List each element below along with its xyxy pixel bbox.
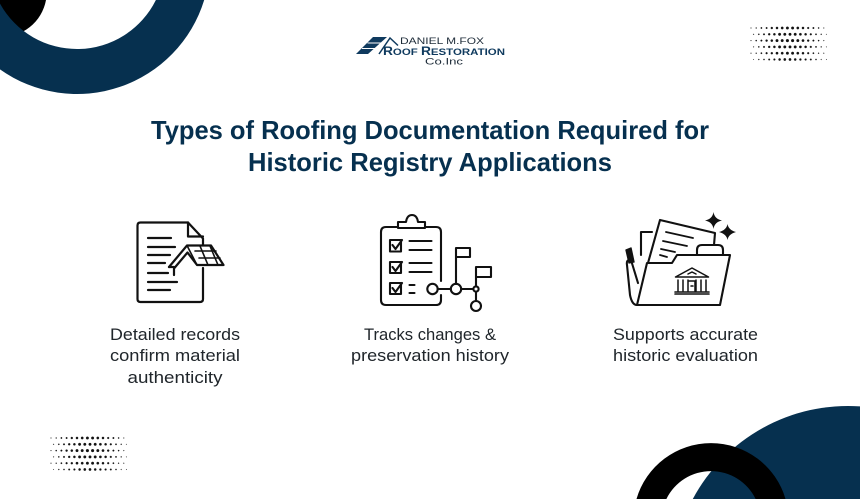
caption: Supports accurate [613, 326, 758, 344]
caption [110, 326, 240, 387]
decoration: top-right halftone dots [751, 27, 827, 61]
icon: sparkles [705, 212, 736, 240]
decoration: bottom-left halftone dots [51, 437, 127, 471]
column 3: historic evaluation [613, 212, 758, 365]
decoration: bottom-right navy circle and black ring [636, 406, 860, 499]
caption: historic evaluation [613, 347, 758, 365]
caption: preservation history [351, 347, 510, 365]
column 2: preservation history [351, 215, 510, 365]
logo line: Roof Restoration: ROOF RESTORATION [383, 46, 505, 58]
icon: logo roof [356, 37, 398, 54]
title: Historic Registry Applications [248, 147, 612, 177]
icon: document with roof [138, 222, 224, 302]
logo line: Daniel M. Fox: DANIEL M.FOX [400, 36, 484, 46]
icon: checklist and timeline [381, 215, 491, 311]
caption [351, 326, 510, 365]
caption: authenticity [128, 369, 223, 387]
logo: Daniel M. Fox Roof Restoration [356, 36, 505, 66]
caption [613, 326, 758, 365]
logo line: Co. Inc: Co.Inc [425, 56, 464, 66]
decoration: top-left black circle and navy ring [0, 0, 204, 94]
column 1: material authenticity [110, 222, 240, 387]
caption: confirm material [110, 347, 240, 365]
title [151, 115, 709, 177]
caption: Tracks changes & [364, 326, 496, 344]
title: Types of Roofing Documentation Required for [151, 115, 709, 145]
caption: Detailed records [110, 326, 240, 344]
icon: folder with bank [626, 220, 730, 305]
